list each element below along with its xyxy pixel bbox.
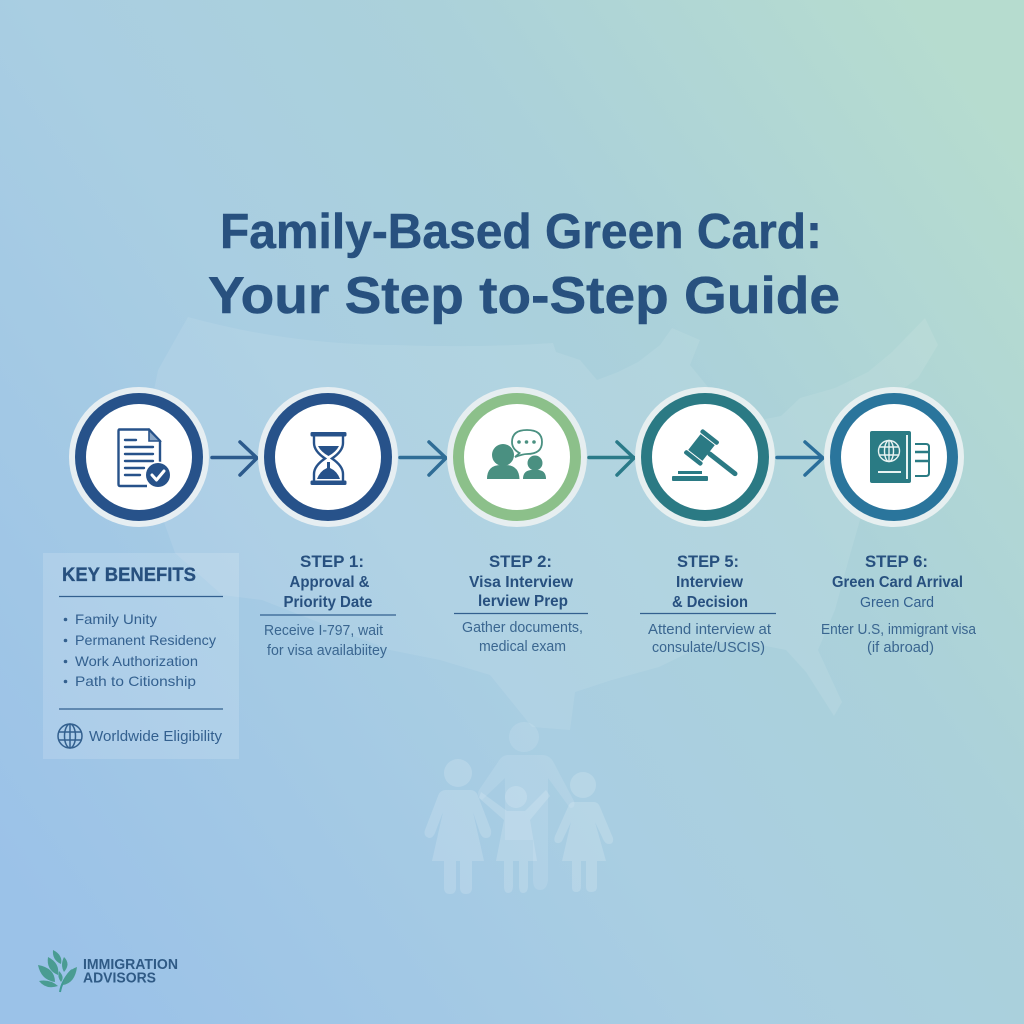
heading: key benefits: KEY BENEFITS — [62, 565, 196, 586]
right child figure — [554, 772, 613, 892]
arrow 2 — [400, 442, 446, 475]
arrow 4 — [777, 442, 823, 475]
logo wordmark: IMMIGRATION — [83, 957, 178, 973]
circle 1: document icon — [69, 387, 209, 527]
icon: leaf sprig — [38, 950, 77, 992]
step 5 text: & Decision — [672, 594, 748, 611]
circle 4: gavel icon — [635, 387, 775, 527]
step 6 text: Enter U.S, immigrant visa — [821, 622, 977, 638]
logo wordmark: ADVISORS — [83, 970, 156, 986]
benefits list: Path to Citionship — [75, 673, 196, 689]
step 1 text: for visa availabiitey — [267, 643, 388, 659]
step 5 text: Interview — [676, 574, 744, 591]
circle 2: hourglass icon — [258, 387, 398, 527]
step 5 text — [640, 552, 776, 656]
step 1 text — [260, 552, 396, 659]
panel: key benefits — [43, 553, 239, 759]
step 2 text: Gather documents, — [462, 620, 583, 636]
center child figure — [479, 786, 550, 893]
step 1 text: Priority Date — [284, 594, 373, 611]
title: Family-Based Green Card: — [220, 205, 822, 259]
step 1 text: Receive I-797, wait — [264, 623, 383, 639]
icon: passport and card — [870, 431, 929, 483]
step 6 text: (if abroad) — [867, 640, 934, 656]
adult figure — [478, 722, 574, 890]
step 5 text: Attend interview at — [648, 622, 771, 638]
icon: hourglass — [310, 432, 346, 485]
step 5 text: STEP 5: — [677, 552, 739, 571]
benefits list: Family Unity — [75, 611, 157, 627]
title: Your Step to-Step Guide — [208, 267, 840, 325]
icon: people talking — [487, 430, 546, 479]
step 2 text: Visa Interview — [469, 574, 574, 591]
arrow 1 — [212, 442, 257, 475]
step 2 text: medical exam — [479, 639, 566, 655]
step 1 text: Approval & — [290, 574, 370, 591]
left child figure — [424, 759, 491, 894]
step 5 text: consulate/USCIS) — [652, 640, 765, 656]
step 1 text: STEP 1: — [300, 552, 364, 571]
circle 3: interview prep icon — [447, 387, 587, 527]
worldwide eligibility label: Worldwide Eligibility — [89, 729, 223, 745]
step 2 text: STEP 2: — [489, 552, 552, 571]
step 6 text: Green Card Arrival — [832, 574, 963, 591]
circle 5: passport icon — [824, 387, 964, 527]
background map of the United States — [146, 317, 938, 730]
step 2 text — [454, 552, 588, 655]
arrow 3 — [589, 442, 634, 475]
title — [208, 205, 840, 325]
logo — [38, 950, 178, 992]
benefits list: Work Authorization — [75, 653, 198, 669]
icon: gavel — [672, 429, 747, 487]
icon: globe — [58, 724, 82, 748]
background family silhouette — [424, 722, 613, 894]
step 6 text: STEP 6: — [865, 552, 928, 571]
logo wordmark — [83, 957, 178, 986]
icon: document with check — [118, 430, 172, 488]
step 6 text: Green Card — [860, 594, 934, 611]
step 2 text: lerview Prep — [478, 593, 568, 610]
benefits list: Permanent Residency — [75, 632, 216, 648]
benefits list — [64, 611, 216, 689]
step 6 text — [821, 552, 977, 656]
